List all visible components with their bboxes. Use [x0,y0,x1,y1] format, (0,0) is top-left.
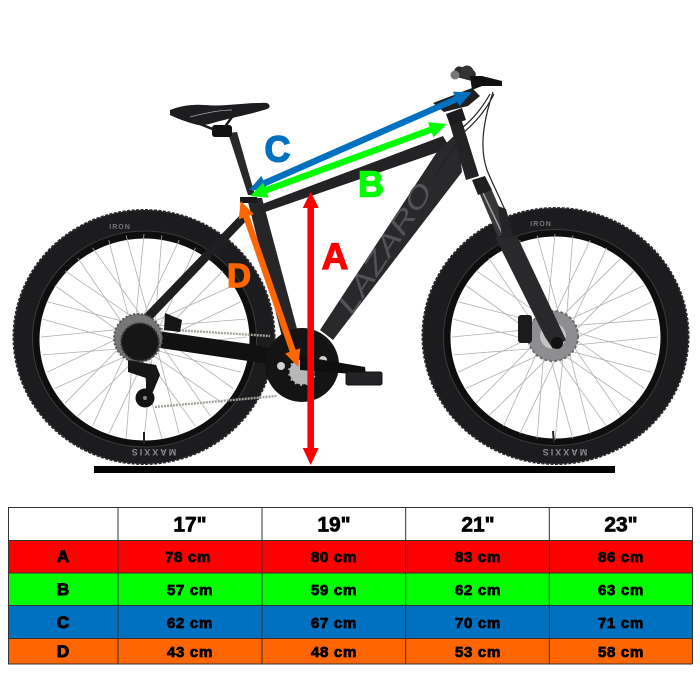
pedal [346,372,382,385]
row B: 57 cm [167,582,213,599]
row B: 62 cm [455,582,501,599]
row A: 83 cm [455,549,501,566]
top tube [257,136,450,213]
row A: 80 cm [311,549,357,566]
header row: 23" [604,514,638,536]
row A: 78 cm [165,549,211,566]
label C: C [264,128,290,170]
chainring [265,328,339,402]
row A: 86 cm [598,549,644,566]
row B: 59 cm [311,582,357,599]
head tube [448,115,479,180]
row B: B [57,580,69,599]
rear wheel: MAXXIS [130,447,176,457]
row D: 58 cm [598,644,644,661]
row B: 63 cm [598,582,644,599]
cassette [121,323,159,361]
arrow A [303,192,319,465]
label D: D [227,257,251,294]
chain [143,328,277,407]
row B [8,573,692,606]
header row: 19" [317,514,351,536]
size table [8,508,692,664]
label B: B [358,164,384,204]
row C: 70 cm [455,615,501,632]
rear derailleur [128,360,160,392]
drivetrain [114,313,382,408]
row C: 71 cm [598,615,644,632]
rear brake rotor [114,314,162,362]
arrow B [250,122,447,198]
rear wheel [14,210,274,464]
fork [472,176,566,349]
saddle and seat post [170,103,270,195]
row A [8,540,692,573]
chain stay [136,328,296,366]
seat stay [132,212,249,334]
stem and handlebar [433,65,505,210]
down tube [320,132,462,340]
front wheel: IRON [530,221,552,228]
arrow C [249,92,472,190]
label A: A [322,236,348,277]
ground line [94,466,615,473]
row D: D [57,642,69,661]
header row: 17" [173,514,207,536]
front wheel [422,208,688,464]
row C: 62 cm [167,615,213,632]
row C: C [57,613,69,632]
arrow D [239,201,300,367]
seat tube [247,198,300,345]
row D: 53 cm [455,644,501,661]
row A: A [57,547,69,566]
header row: 21" [461,514,495,536]
frame brand: LAZARO [332,177,439,319]
bike frame [132,115,479,366]
row D: 43 cm [167,644,213,661]
front brake rotor and caliper [518,311,578,361]
row C: 67 cm [311,615,357,632]
row D: 48 cm [311,644,357,661]
seat collar [240,197,257,203]
rear wheel: IRON [109,224,131,231]
row D [8,638,692,664]
front wheel: MAXXIS [541,447,587,457]
header row [8,508,692,540]
row C [8,606,692,638]
